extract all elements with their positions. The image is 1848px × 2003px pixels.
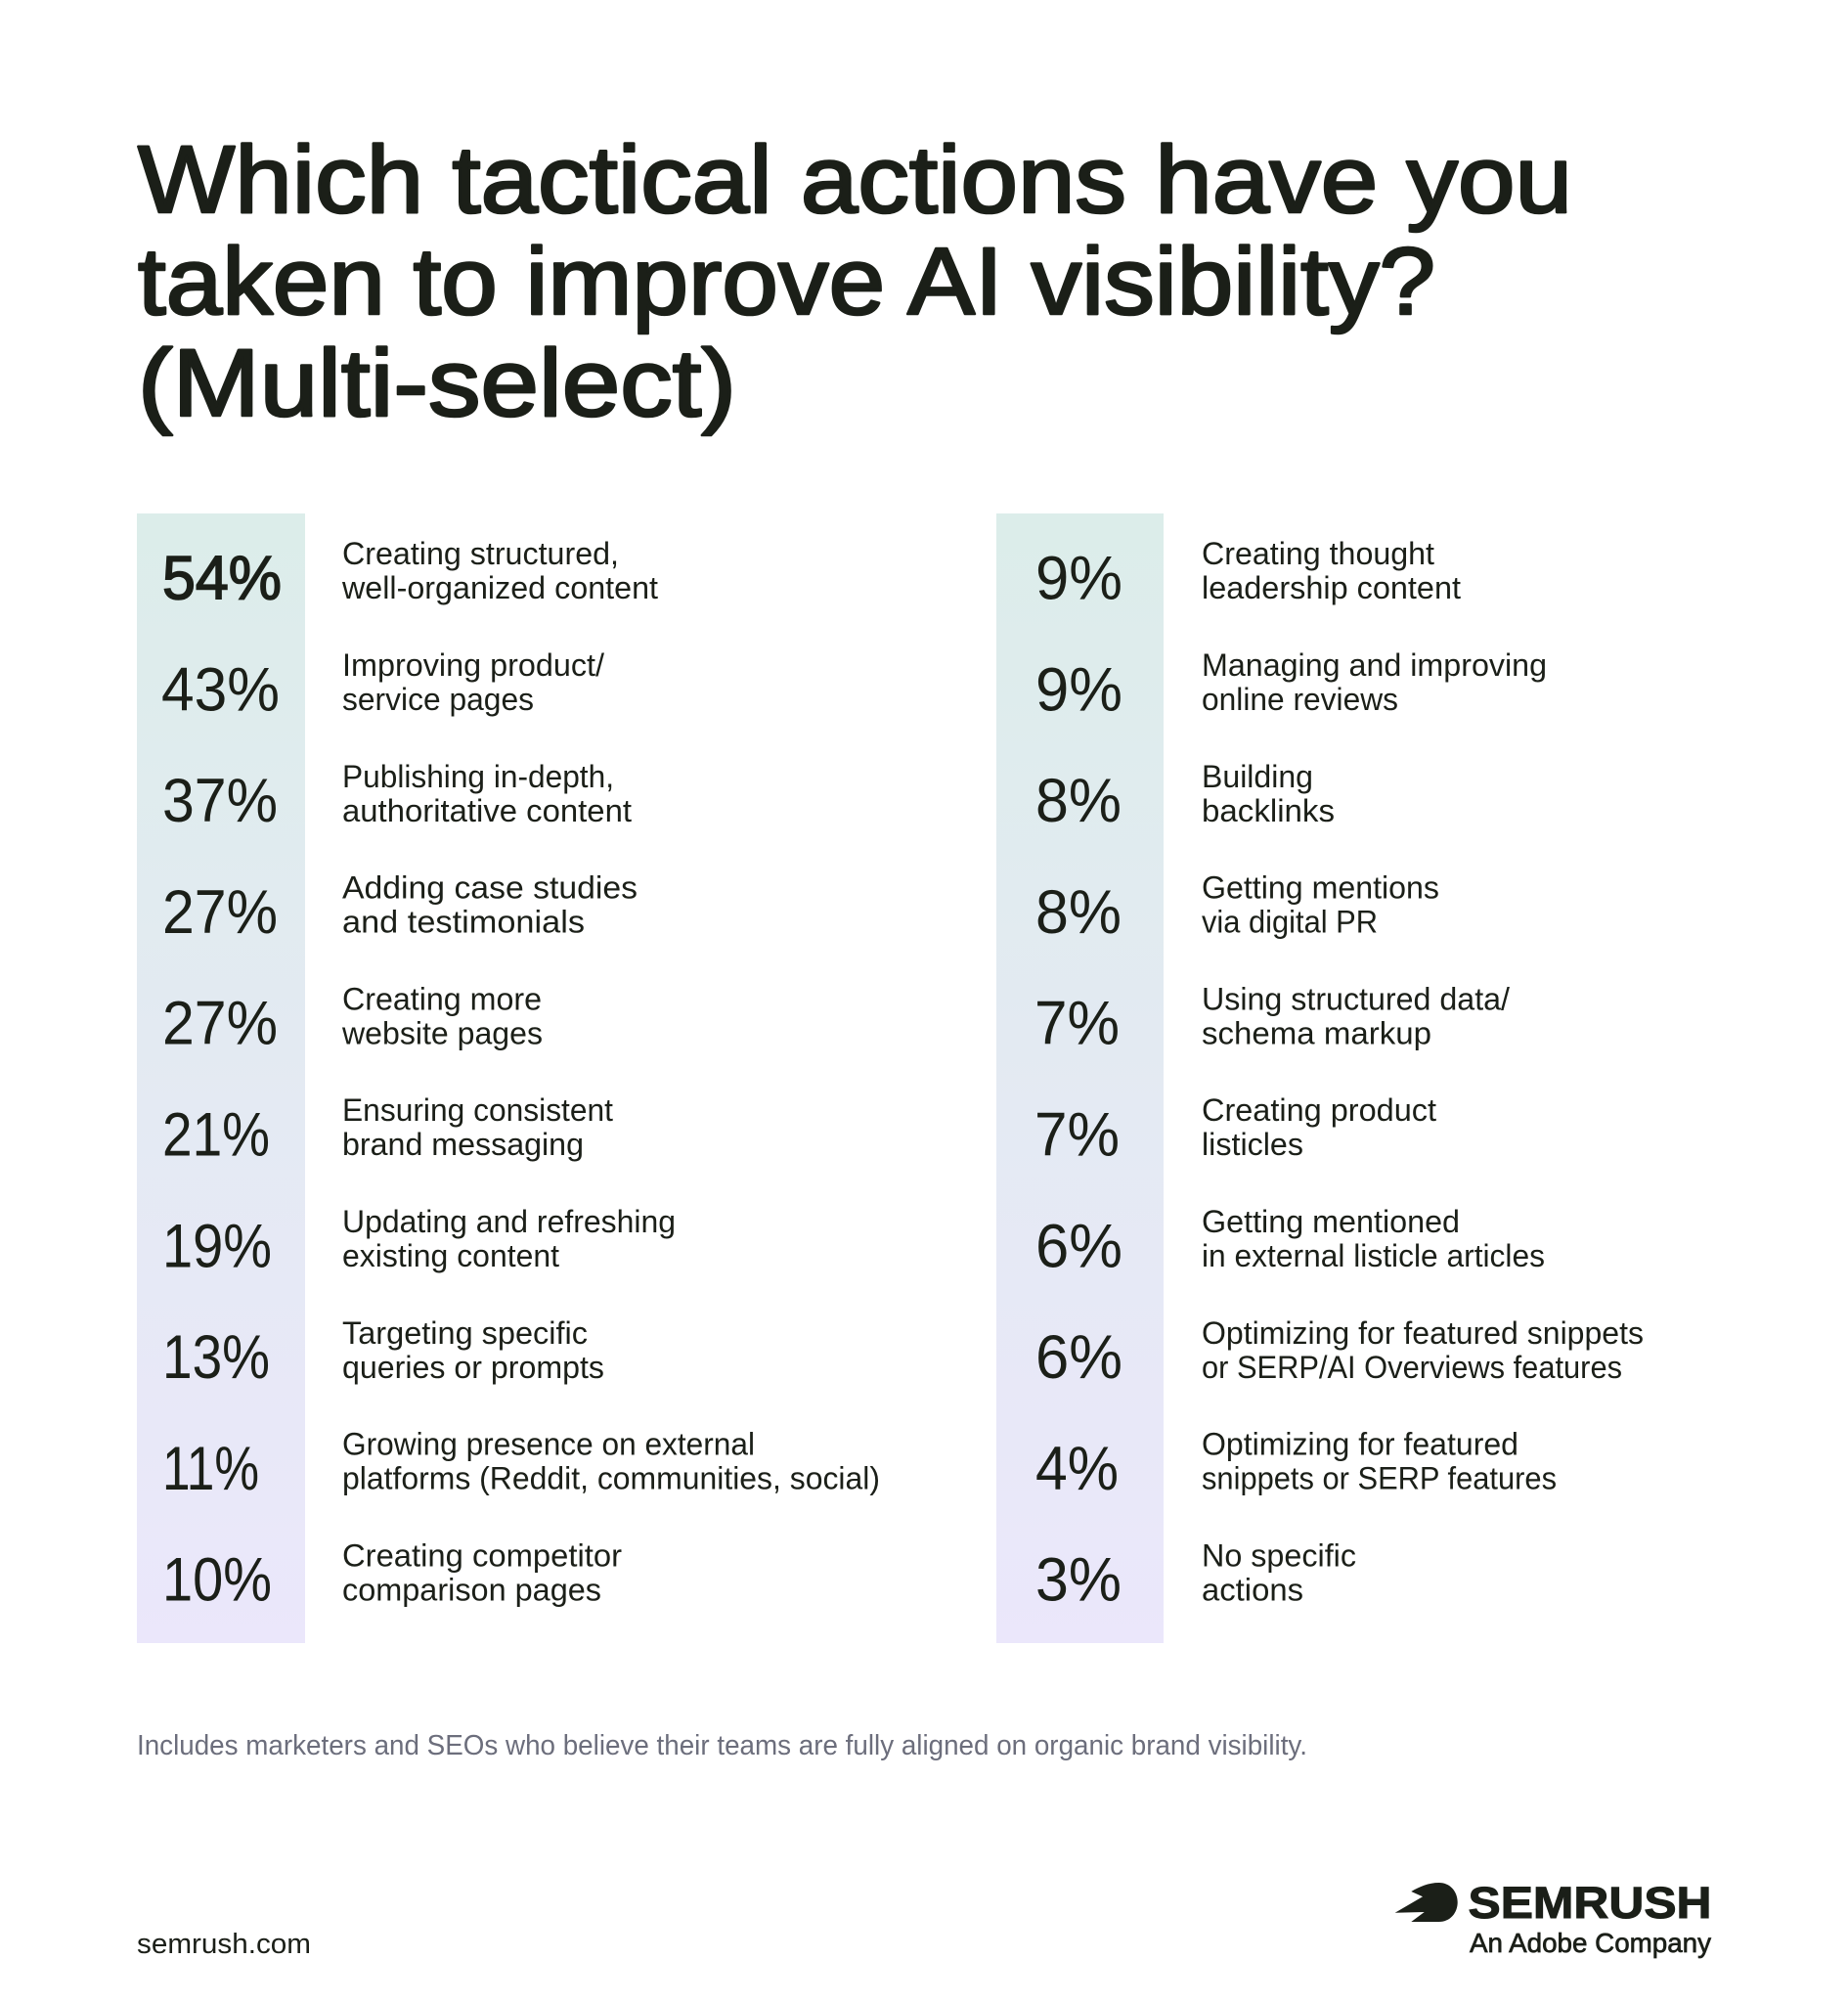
row: 4% (1035, 1427, 1557, 1503)
row: 11%: 11% (162, 1435, 259, 1503)
row: 3% (1035, 1537, 1356, 1615)
row: 27% website pages: website pages (341, 1015, 543, 1050)
panel: right gradient band (996, 513, 1164, 1643)
row: 4%: 4% (1035, 1435, 1119, 1503)
row: 37% (162, 759, 632, 835)
row: 8% digital PR (1035, 870, 1439, 947)
row: 10% (162, 1537, 622, 1615)
row: 8% backlinks (1035, 759, 1335, 835)
row: 27% website pages: Creating more (342, 981, 542, 1016)
row: 8% digital PR: via digital PR (1202, 905, 1378, 940)
row: 13% (162, 1315, 604, 1392)
row: 54% (162, 536, 658, 612)
panel: left gradient band (137, 513, 305, 1643)
row: 37%: Publishing in-depth, (342, 759, 614, 794)
logo: Semrush (1395, 1878, 1711, 1958)
row: 9% online reviews: 9% (1035, 655, 1122, 724)
row: 6% snippets and overviews (1035, 1315, 1644, 1392)
row: 7% listicles: Creating product (1202, 1092, 1436, 1128)
row: 8% digital PR: Getting mentions (1202, 870, 1439, 906)
row: 54%: 54% (162, 544, 282, 612)
row: 4%: snippets or SERP features (1202, 1461, 1557, 1496)
row: 6% external listicles (1035, 1204, 1545, 1280)
row: 19%: Updating and refreshing (342, 1204, 676, 1239)
row: 13%: Targeting specific (342, 1315, 588, 1351)
row: 7% listicles (1034, 1092, 1436, 1170)
row: 7% listicles: 7% (1034, 1101, 1120, 1170)
row: 3%: No specific (1202, 1537, 1356, 1573)
row: 3%: 3% (1035, 1546, 1122, 1615)
row: 27% case studies (162, 870, 638, 947)
row: 21%: brand messaging (342, 1127, 584, 1162)
row: 13%: queries or prompts (342, 1350, 604, 1385)
row: 37%: 37% (162, 767, 278, 835)
row: 43%: 43% (161, 655, 280, 724)
row: 43% (161, 647, 604, 724)
row: 43%: service pages (342, 682, 534, 717)
row: 19% (162, 1204, 676, 1280)
row: 21% (162, 1092, 613, 1170)
wordmark: SEMRUSH (1469, 1878, 1711, 1928)
row: 9% thought leadership: leadership content (1202, 570, 1461, 605)
row: 9% thought leadership: Creating thought (1202, 536, 1434, 571)
row: 10%: Creating competitor (342, 1537, 622, 1573)
right column rows (1034, 536, 1644, 1615)
row: 37%: authoritative content (342, 793, 632, 828)
row: 27% case studies: and testimonials (342, 905, 585, 940)
footnote: Includes marketers and SEOs who believe their teams are fully aligned on organic brand visibility. (137, 1730, 1307, 1761)
row: 6% external listicles: Getting mentioned (1202, 1204, 1460, 1239)
icon: comet (1395, 1883, 1458, 1922)
title: taken to improve AI visibility? (138, 228, 1435, 334)
row: 6% snippets and overviews: 6% (1035, 1323, 1122, 1392)
row: 54%: well-organized content (341, 570, 658, 605)
row: 7% schema: 7% (1034, 990, 1120, 1058)
row: 19%: existing content (342, 1238, 559, 1273)
row: 11%: platforms (Reddit, communities, social) (342, 1461, 880, 1496)
row: 7% schema: schema markup (1202, 1015, 1431, 1050)
row: 10%: 10% (162, 1546, 272, 1615)
title (138, 126, 1572, 436)
row: 11%: Growing presence on external (342, 1427, 755, 1462)
title: Which tactical actions have you (138, 126, 1572, 233)
row: 8% digital PR: 8% (1035, 878, 1122, 947)
row: 8% backlinks: backlinks (1202, 793, 1335, 828)
row: 6% external listicles: 6% (1035, 1212, 1122, 1280)
row: 3%: actions (1202, 1572, 1303, 1607)
row: 10%: comparison pages (342, 1572, 601, 1607)
row: 7% schema (1034, 981, 1510, 1058)
row: 6% snippets and overviews: or SERP/AI Overviews features (1202, 1350, 1622, 1385)
row: 8% backlinks: Building (1202, 759, 1313, 794)
row: 7% schema: Using structured data/ (1202, 981, 1510, 1016)
row: 6% external listicles: in external listicle articles (1202, 1238, 1545, 1273)
row: 4%: Optimizing for featured (1202, 1427, 1518, 1462)
row: 9% online reviews (1035, 647, 1547, 724)
row: 9% online reviews: online reviews (1202, 682, 1398, 717)
row: 54%: Creating structured, (342, 536, 619, 571)
row: 19%: 19% (162, 1212, 272, 1280)
row: 43%: Improving product/ (342, 647, 604, 683)
title: (Multi-select) (138, 330, 736, 436)
left column rows (161, 536, 880, 1615)
row: 9% thought leadership (1035, 536, 1461, 612)
tagline: An Adobe Company (1470, 1928, 1711, 1958)
row: 27% case studies: 27% (162, 878, 278, 947)
row: 27% website pages (162, 981, 543, 1058)
row: 9% thought leadership: 9% (1035, 544, 1122, 612)
row: 9% online reviews: Managing and improving (1202, 647, 1547, 683)
row: 27% case studies: Adding case studies (342, 870, 638, 906)
row: 7% listicles: listicles (1202, 1127, 1303, 1162)
row: 6% snippets and overviews: Optimizing for featured snippets (1202, 1315, 1644, 1351)
website url: semrush.com (137, 1929, 311, 1960)
row: 13%: 13% (162, 1323, 270, 1392)
row: 27% website pages: 27% (162, 990, 278, 1058)
row: 21%: Ensuring consistent (342, 1092, 613, 1128)
row: 8% backlinks: 8% (1035, 767, 1122, 835)
row: 21%: 21% (162, 1101, 270, 1170)
row: 11% (162, 1427, 880, 1503)
